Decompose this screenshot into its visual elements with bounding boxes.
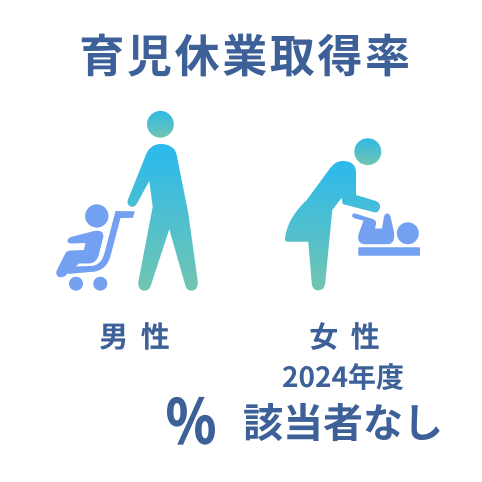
label: fiscal year: 2024年度 bbox=[282, 356, 404, 396]
baby on changing table bbox=[352, 213, 420, 256]
stroller bbox=[56, 204, 135, 291]
percent sign: % bbox=[166, 375, 216, 461]
icon: man with stroller bbox=[56, 111, 198, 291]
changing table bbox=[358, 247, 420, 256]
title: 育児休業取得率 bbox=[79, 20, 413, 85]
child body bbox=[56, 231, 103, 277]
label: male: 男 性 bbox=[99, 314, 173, 356]
man body bbox=[127, 144, 198, 291]
value: none applicable: 該当者なし bbox=[243, 391, 443, 449]
icon: woman changing baby bbox=[285, 138, 420, 290]
woman head bbox=[354, 138, 381, 165]
child head bbox=[85, 204, 109, 228]
man head bbox=[147, 111, 174, 138]
label: female: 女 性 bbox=[309, 314, 383, 356]
wheels bbox=[69, 277, 83, 291]
woman body bbox=[285, 161, 380, 290]
